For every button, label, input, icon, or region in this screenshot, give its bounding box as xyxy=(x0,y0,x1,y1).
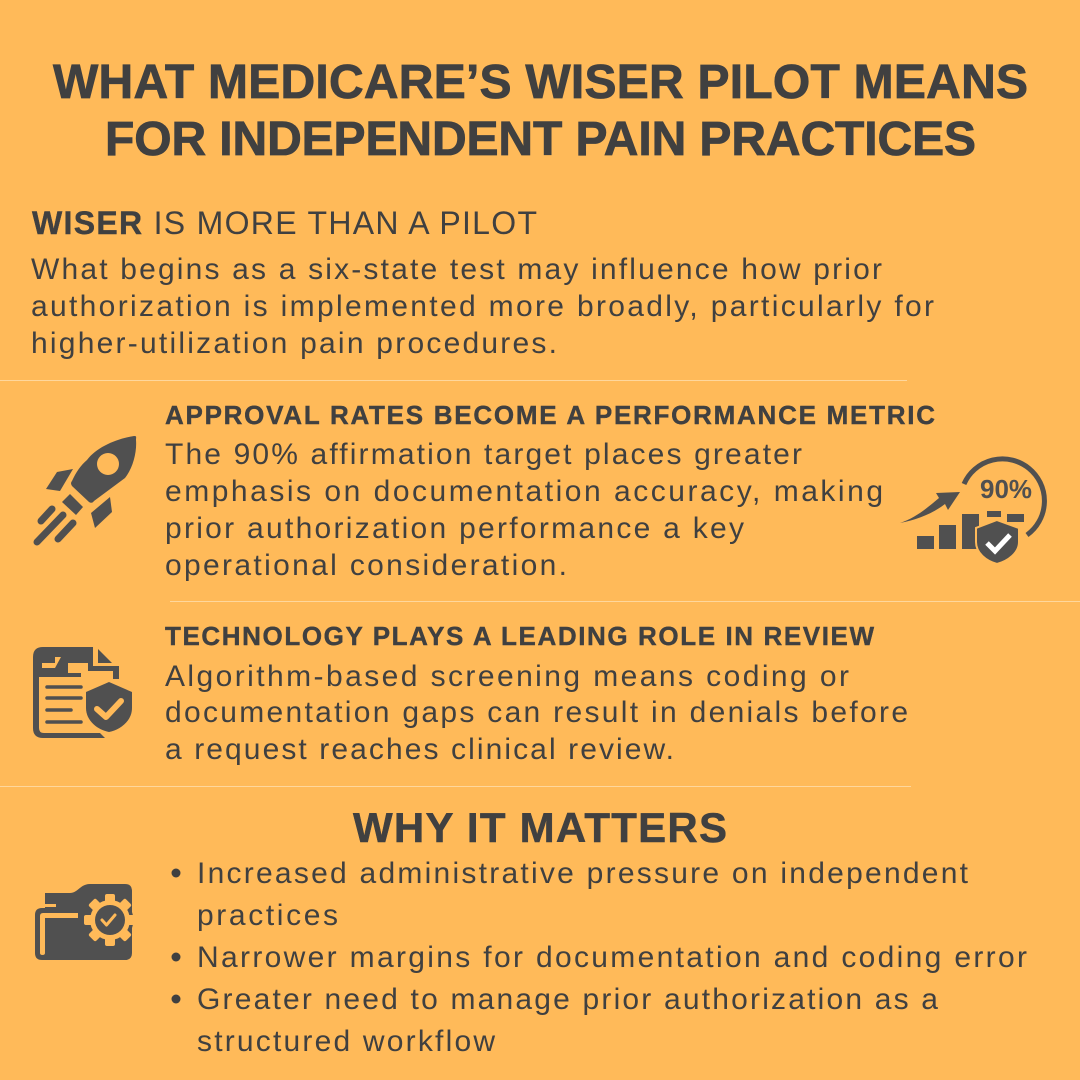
text block: technology description xyxy=(165,660,908,766)
text block: bullet list: structured workflow xyxy=(197,1025,495,1058)
text block: approval description: prior authorization performance a key xyxy=(165,512,744,545)
text block: approval description: The 90% affirmation target places greater xyxy=(165,438,802,471)
title xyxy=(53,56,1028,166)
panel: WISER is more than a pilot xyxy=(31,205,934,360)
text block: technology description: Algorithm-based screening means coding or xyxy=(165,660,849,693)
panel: why it matters xyxy=(35,804,1027,1058)
text block: technology description: documentation gaps can result in denials before xyxy=(165,696,908,729)
text block: bullet list: Greater need to manage prior authorization as a xyxy=(197,983,938,1016)
icon: rocket xyxy=(37,436,136,542)
text block: bullet list xyxy=(172,857,1027,1058)
heading: approval rates become a performance metric: APPROVAL RATES BECOME A PERFORMANCE METRIC xyxy=(165,400,935,430)
text block: technology description: a request reaches clinical review. xyxy=(165,733,674,766)
heading: technology plays a leading role in review: TECHNOLOGY PLAYS A LEADING ROLE IN REVIEW xyxy=(165,621,874,651)
icon: folder with gear xyxy=(35,884,136,960)
text block: pilot description xyxy=(31,253,934,360)
title: WHAT MEDICARE’S WISER PILOT MEANS xyxy=(53,56,1028,109)
icon: document with shield xyxy=(33,647,132,738)
title: FOR INDEPENDENT PAIN PRACTICES xyxy=(105,113,976,166)
text block: approval description: operational consideration. xyxy=(165,549,567,582)
panel: approval rates xyxy=(37,400,1044,582)
text block: bullet list: Narrower margins for documentation and coding error xyxy=(197,941,1027,974)
text block: pilot description: authorization is implemented more broadly, particularly for xyxy=(31,290,934,323)
text block: bullet list: practices xyxy=(197,899,338,932)
icon: 90% growth chart with shield: 90% xyxy=(980,474,1032,504)
panel: technology xyxy=(33,621,908,766)
heading: WISER is more than a pilot: WISER IS MORE THAN A PILOT xyxy=(32,205,537,241)
text block: pilot description: What begins as a six-state test may influence how prior xyxy=(31,253,882,286)
text block: approval description: emphasis on documentation accuracy, making xyxy=(165,475,883,508)
text block: pilot description: higher-utilization pain procedures. xyxy=(31,327,557,360)
heading: why it matters: WHY IT MATTERS xyxy=(353,804,727,851)
text block: bullet list: Increased administrative pressure on independent xyxy=(197,857,969,890)
text block: approval description xyxy=(165,438,883,582)
icon: 90% growth chart with shield xyxy=(900,459,1044,564)
